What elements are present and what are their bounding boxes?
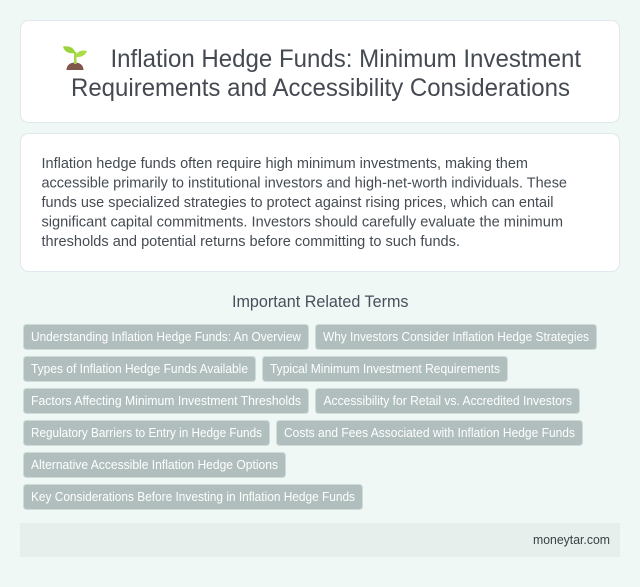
- heading: important related terms: Important Related Terms: [232, 293, 408, 311]
- tag: factors: [24, 388, 308, 414]
- tag: understanding: Understanding Inflation Hedge Funds: An Overview: [31, 329, 302, 344]
- icon: seedling: [63, 46, 87, 70]
- panel: title card: [20, 20, 620, 122]
- tag: regulatory: Regulatory Barriers to Entry in Hedge Funds: [31, 425, 262, 440]
- panel: summary paragraph: [20, 134, 620, 272]
- tag: regulatory: [24, 420, 270, 446]
- tag: why investors: Why Investors Consider Inflation Hedge Strategies: [323, 329, 589, 344]
- tag: accessibility: Accessibility for Retail vs. Accredited Investors: [324, 393, 572, 408]
- tag: types: Types of Inflation Hedge Funds Available: [31, 361, 248, 376]
- tag: alternative: [24, 452, 286, 478]
- tag: factors: Factors Affecting Minimum Investment Thresholds: [31, 393, 301, 408]
- tag: costs: Costs and Fees Associated with Inflation Hedge Funds: [284, 425, 575, 440]
- tag: why investors: [316, 324, 596, 350]
- tag: key considerations: Key Considerations Before Investing in Inflation Hedge Funds: [31, 489, 355, 504]
- title line 1: Inflation Hedge Funds: Minimum Investment: [110, 45, 581, 73]
- paragraph line 5: thresholds and potential returns before committing to such funds.: [42, 234, 460, 250]
- paragraph line 3: funds use specialized strategies to protect against rising prices, which can entail: [42, 195, 554, 211]
- tag: understanding: [24, 324, 308, 350]
- tag: accessibility: [316, 388, 580, 414]
- tag: costs: [276, 420, 582, 446]
- footer site name: moneytar.com: [533, 532, 610, 547]
- tag: typical minimum: Typical Minimum Investment Requirements: [270, 361, 500, 376]
- tag: typical minimum: [262, 356, 508, 382]
- footer: [20, 523, 620, 557]
- paragraph line 4: significant capital commitments. Investors should carefully evaluate the minimum: [42, 214, 563, 230]
- tag: key considerations: [24, 484, 362, 510]
- tag: alternative: Alternative Accessible Inflation Hedge Options: [31, 457, 278, 472]
- paragraph line 1: Inflation hedge funds often require high minimum investments, making them: [42, 156, 528, 172]
- paragraph line 2: accessible primarily to institutional investors and high-net-worth individuals. These: [42, 176, 567, 192]
- title line 2: Requirements and Accessibility Considerations: [71, 74, 570, 102]
- tag list: [24, 324, 596, 510]
- tag: types: [24, 356, 256, 382]
